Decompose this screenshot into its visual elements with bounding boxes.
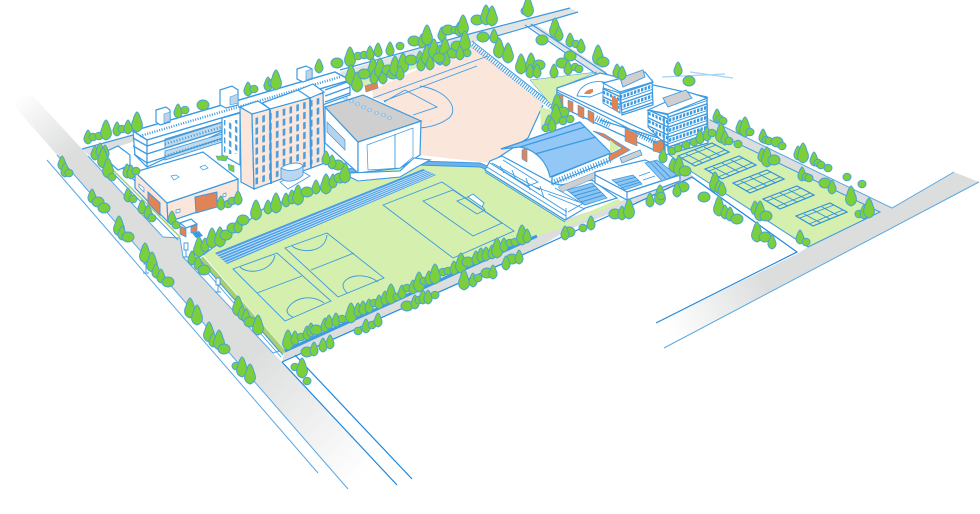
low hall building [135, 152, 238, 222]
orange wing panels [558, 94, 665, 154]
trees: north grove [345, 0, 533, 92]
sports field [198, 161, 622, 357]
tennis courts [678, 143, 847, 226]
wing wall [557, 90, 665, 155]
baseball ground [372, 41, 555, 163]
orange courtyard wall [593, 131, 630, 161]
rooftop boxes [156, 66, 312, 125]
tall classroom tower [240, 84, 325, 189]
trees: along field south edge [283, 182, 689, 350]
soccer pitch [383, 182, 514, 258]
trees: north-east [494, 18, 695, 132]
grove understory [345, 40, 472, 88]
east school complex [557, 70, 708, 155]
road: north lanes [82, 8, 607, 156]
curved rooftop terrace [577, 82, 604, 97]
long school building [107, 66, 350, 170]
trees: tennis area [659, 109, 874, 249]
green patch by gym [540, 107, 570, 130]
trees: main road verge [58, 156, 334, 385]
trees: west of school [84, 58, 343, 229]
tower entrance [280, 163, 310, 189]
assembly hall with grey roof [325, 82, 430, 181]
road edge lines [47, 72, 979, 489]
trees: along field north edge [194, 151, 350, 257]
south annex with stripes [595, 150, 680, 200]
blue-roofed gymnasium [485, 122, 617, 222]
spectator stands [485, 156, 617, 222]
green courtyard sliver [610, 140, 620, 153]
road: bottom-right avenue [656, 172, 979, 348]
green courtyard patches [216, 156, 234, 172]
building A [603, 70, 653, 115]
annex [107, 146, 130, 170]
green strip behind east wing [530, 72, 597, 107]
running track [215, 169, 436, 264]
road: south lane [282, 172, 694, 362]
balcony hatching [596, 118, 655, 142]
gym pool [567, 183, 607, 205]
court lines [233, 233, 384, 321]
tennis lawn [667, 131, 880, 247]
gate house [180, 219, 203, 238]
road: main diagonal avenue [9, 95, 397, 489]
lamp posts [143, 243, 221, 292]
building B [648, 90, 707, 150]
road: east lane beside tennis courts [704, 118, 892, 213]
